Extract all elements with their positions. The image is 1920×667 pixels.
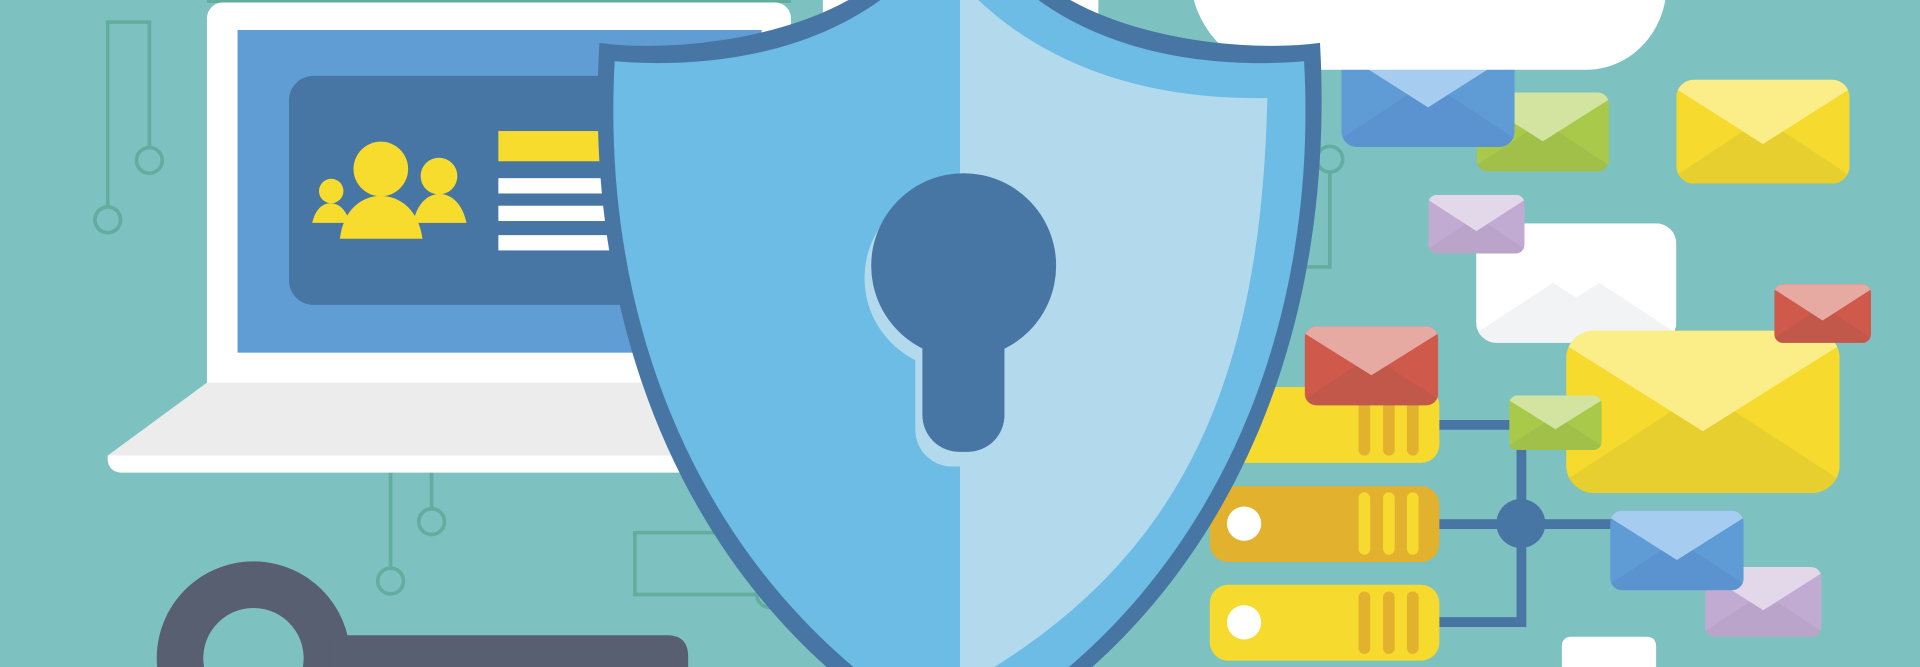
laptop [108,2,791,473]
shield light right half [960,0,1267,667]
cloud [1194,0,1665,70]
envelope: green top [1476,92,1609,172]
keyhole [871,173,1056,452]
laptop front edge [108,456,735,473]
envelope: red small [1774,284,1871,343]
laptop lid [207,2,791,407]
envelope: white bottom [1562,637,1656,667]
envelope: blue top [1342,70,1514,147]
network node [1496,499,1545,548]
keyhole shadow [864,228,960,466]
shield [598,0,1322,667]
envelope: green small [1509,396,1602,450]
network connector lines [1433,416,1622,622]
envelope: large yellow [1566,330,1840,493]
laptop screen [238,30,762,353]
envelope: purple lower [1705,567,1822,637]
card text bars [498,131,618,250]
icon: people [312,142,467,239]
white block behind shield [823,0,1098,37]
envelope: blue lower [1610,510,1744,590]
shield body [613,0,1305,667]
laptop keyboard deck [108,383,735,456]
server 1 [1210,387,1439,463]
server 3 [1210,585,1439,661]
icon: key [157,561,688,667]
circuit lines [95,1,1343,607]
envelope: yellow top right [1676,80,1850,184]
envelope: purple top [1428,194,1524,254]
shield outline [598,0,1322,667]
profile card [289,76,705,305]
envelope: white [1476,223,1676,343]
envelope: red large [1304,326,1438,406]
server 2 [1210,486,1439,562]
